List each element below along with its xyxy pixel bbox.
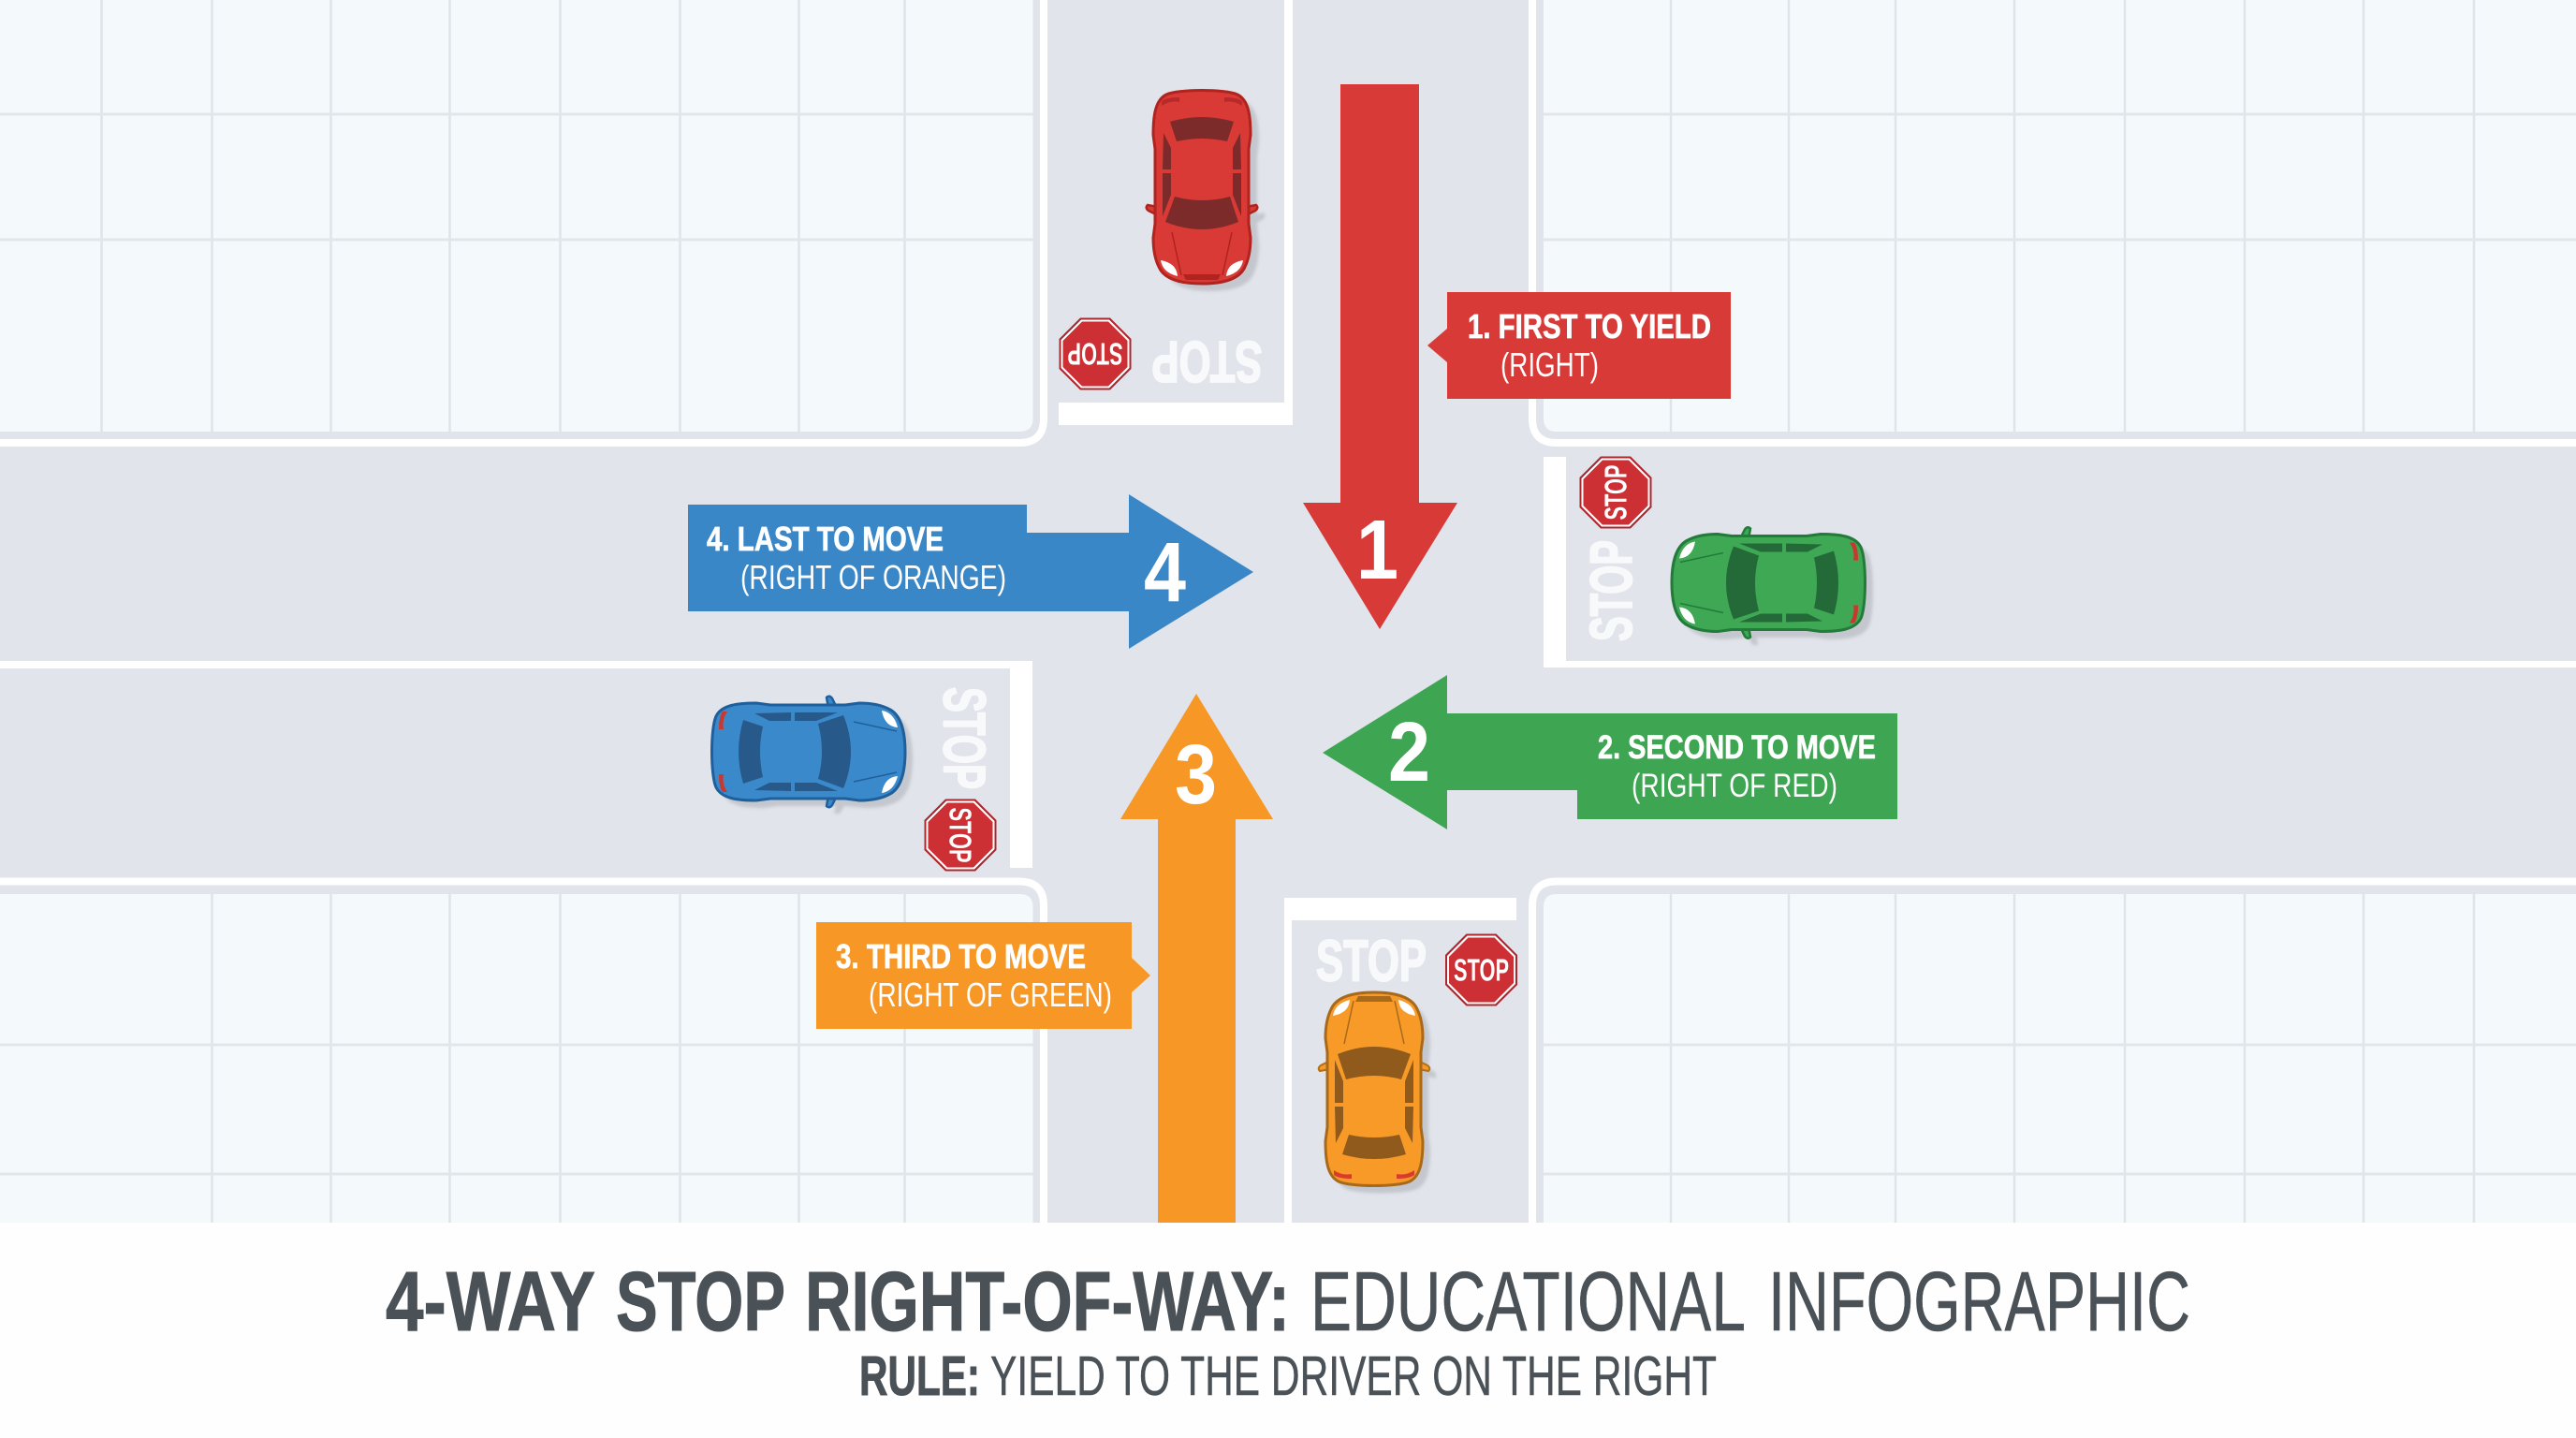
subtitle: rule [859, 1345, 1717, 1407]
callout 1 [1427, 292, 1731, 399]
stop sign: west: STOP [944, 807, 977, 863]
title [386, 1255, 2190, 1349]
arrow number 1: 1 [1356, 504, 1398, 597]
arrow 4: blue, with callout [688, 494, 1253, 649]
stop sign: east: STOP [1599, 464, 1632, 521]
road marking: STOP west: STOP [930, 687, 996, 789]
title: INFOGRAPHIC [1768, 1255, 2190, 1349]
title: STOP [616, 1255, 785, 1349]
arrow 2: green, with callout: 2. SECOND TO MOVE [1598, 729, 1876, 766]
arrow number 3: 3 [1175, 728, 1217, 822]
arrow number 4: 4 [1144, 526, 1186, 620]
callout 3: 3. THIRD TO MOVE [836, 937, 1086, 976]
title: EDUCATIONAL [1310, 1255, 1746, 1349]
callout 3 [816, 922, 1150, 1029]
block: top left [0, 0, 1044, 443]
block: top right [1532, 0, 2576, 443]
callout 1: 1. FIRST TO YIELD [1468, 307, 1711, 345]
road marking: STOP north: STOP [1152, 329, 1262, 393]
arrow 2: green, with callout [1323, 675, 1897, 829]
arrow 4: blue, with callout: 4. LAST TO MOVE [707, 520, 944, 558]
title: 4-WAY [386, 1255, 595, 1349]
block: bottom left [0, 882, 1044, 1223]
subtitle: rule: RULE: [859, 1345, 980, 1407]
callout 1: (RIGHT) [1500, 345, 1599, 384]
subtitle: rule: YIELD TO THE DRIVER ON THE RIGHT [990, 1345, 1717, 1407]
arrow number 2: 2 [1388, 706, 1430, 800]
stop sign: south: STOP [1454, 953, 1509, 987]
car: green [1672, 527, 1873, 645]
block: bottom right [1532, 882, 2576, 1223]
stop sign: north: STOP [1067, 337, 1123, 371]
stop sign: east [1580, 457, 1651, 528]
stop sign: west [925, 800, 996, 871]
arrow 3: orange, with callout [816, 694, 1273, 1223]
stop sign: north [1060, 318, 1131, 389]
stop sign: south [1445, 934, 1517, 1005]
title: RIGHT-OF-WAY: [805, 1255, 1290, 1349]
arrow 4: blue, with callout: (RIGHT OF ORANGE) [740, 558, 1006, 596]
arrow 1: red, with callout [1303, 84, 1731, 629]
road marking: STOP south: STOP [1316, 929, 1427, 994]
car: blue [711, 697, 913, 814]
car: red [1147, 90, 1265, 291]
road marking: STOP east: STOP [1579, 540, 1645, 641]
callout 3: (RIGHT OF GREEN) [869, 976, 1112, 1014]
car: orange [1319, 992, 1436, 1193]
arrow 2: green, with callout: (RIGHT OF RED) [1632, 768, 1837, 804]
